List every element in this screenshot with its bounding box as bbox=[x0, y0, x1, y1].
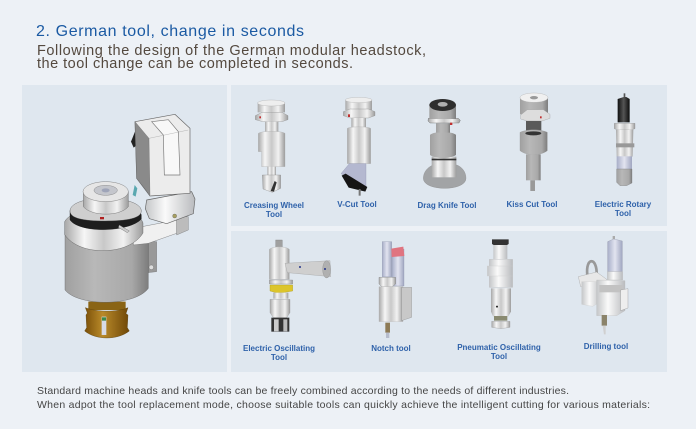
label: kiss cut: Kiss Cut Tool bbox=[507, 200, 557, 209]
intro text bbox=[37, 43, 426, 72]
label: drag knife: Drag Knife Tool bbox=[418, 201, 476, 210]
label: creasing wheel: Creasing Wheel bbox=[244, 201, 304, 210]
tool: drag knife bbox=[423, 99, 466, 188]
tool: pneumatic oscillating bbox=[487, 239, 513, 329]
tool: kiss cut bbox=[520, 93, 550, 191]
label: pneumatic oscillating: Tool bbox=[491, 352, 507, 361]
panel: machine head bbox=[22, 85, 227, 372]
label: electric rotary: Tool bbox=[615, 209, 631, 218]
tool: electric oscillating bbox=[269, 240, 331, 332]
heading: 2. German tool, change in seconds bbox=[36, 23, 304, 40]
tool: creasing wheel bbox=[255, 100, 288, 192]
footer text: Standard machine heads and knife tools can be freely combined according to the needs of different industries. bbox=[37, 385, 569, 397]
label: drilling: Drilling tool bbox=[584, 342, 628, 351]
illustration: modular machine head bbox=[65, 114, 195, 338]
label: electric oscillating: Tool bbox=[271, 353, 287, 362]
label: pneumatic oscillating: Pneumatic Oscillating bbox=[457, 343, 541, 352]
panel: tools row 2 bbox=[231, 231, 667, 372]
footer text: When adpot the tool replacement mode, choose suitable tools can quickly achieve the intelligent cutting for various materials: bbox=[37, 399, 650, 411]
label: V-cut: V-Cut Tool bbox=[337, 200, 377, 209]
tool: drilling bbox=[578, 236, 628, 334]
tool: notch bbox=[379, 242, 412, 338]
label: notch: Notch tool bbox=[371, 344, 411, 353]
panel: tools row 1 bbox=[231, 85, 667, 226]
tool: electric rotary bbox=[614, 93, 635, 186]
intro text: the tool change can be completed in seconds. bbox=[37, 56, 353, 72]
label: creasing wheel: Tool bbox=[266, 210, 282, 219]
label: electric rotary: Electric Rotary bbox=[595, 200, 652, 209]
tool: V-cut bbox=[341, 97, 375, 196]
intro text: Following the design of the German modular headstock, bbox=[37, 43, 426, 59]
footer text bbox=[37, 385, 650, 411]
label: electric oscillating: Electric Oscillating bbox=[243, 344, 315, 353]
